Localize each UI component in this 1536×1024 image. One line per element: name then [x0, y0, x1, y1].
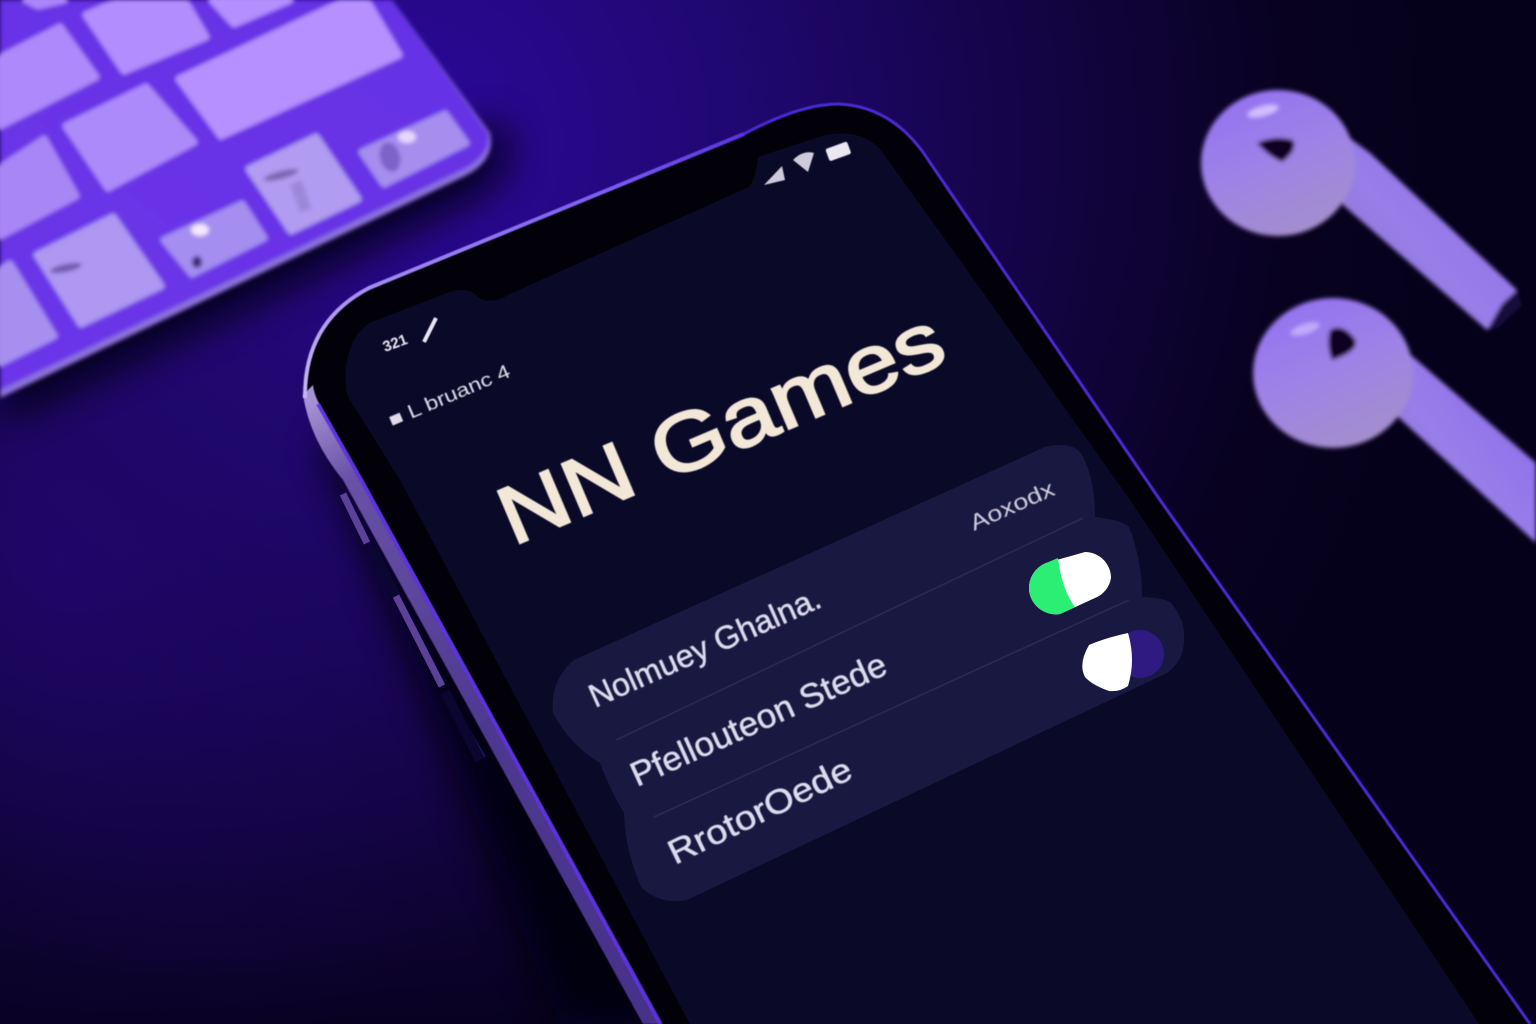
- row value: Aoxodx: [966, 476, 1058, 536]
- phone screen: [346, 133, 1479, 1024]
- earbud speaker hole: [1257, 138, 1294, 162]
- status time: [381, 318, 436, 356]
- left rim band: [303, 385, 663, 1024]
- keyboard: [0, 0, 491, 398]
- rim highlight: [305, 104, 1530, 1024]
- row 2 label: Pfellouteon Stede: [625, 646, 893, 794]
- earbud: upper: [1201, 90, 1522, 330]
- status subtitle: ■ L bruanc 4: [386, 361, 514, 432]
- list panel: [553, 445, 1184, 901]
- phone: [303, 103, 1530, 1024]
- key glyph highlights: [50, 131, 416, 275]
- phone body: [303, 103, 1530, 1024]
- toggle: on: [1029, 552, 1111, 614]
- row 1 label: Nolmuey Ghalna.: [583, 580, 826, 714]
- side buttons: [343, 494, 485, 760]
- status icons: [764, 141, 851, 185]
- earbud speaker hole: [1328, 328, 1356, 360]
- row 3 label: RrotorOede: [662, 750, 858, 872]
- phone shadow: [322, 430, 680, 1024]
- keyboard shadow: [0, 120, 510, 420]
- status time: 321: [381, 331, 410, 356]
- toggle: off: [1082, 630, 1164, 691]
- keyboard keys: [0, 0, 466, 363]
- earbud: lower: [1253, 298, 1536, 543]
- title: NN Games: [484, 292, 957, 562]
